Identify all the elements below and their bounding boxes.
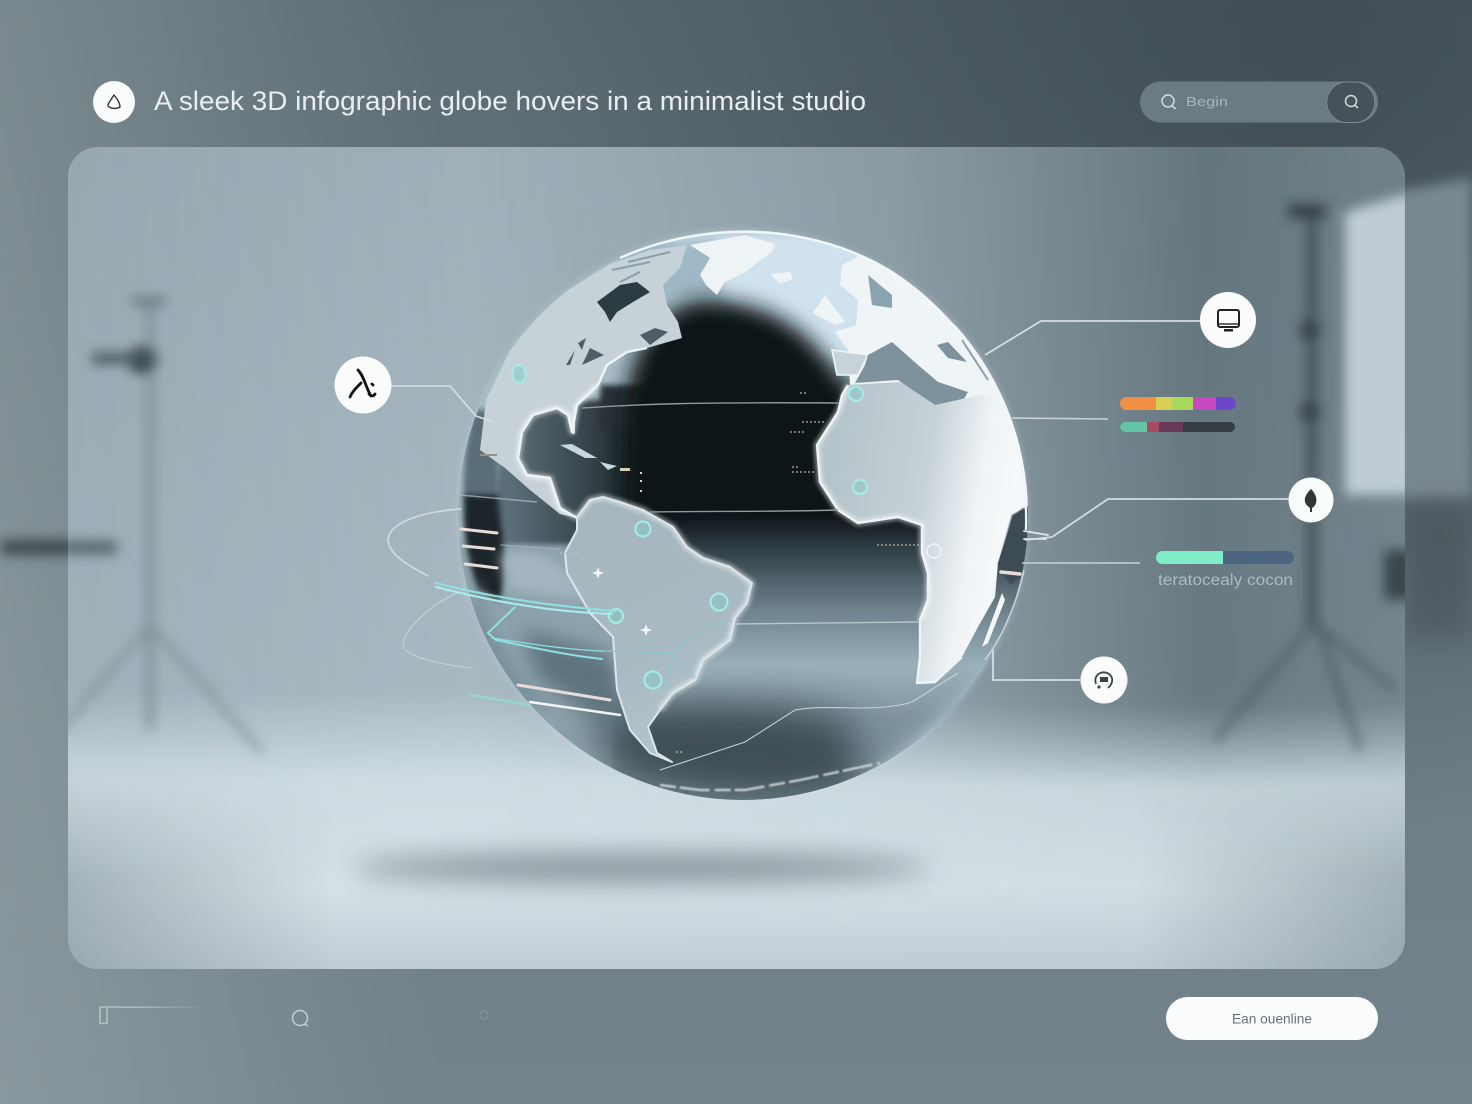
bright coastlines [518, 348, 962, 762]
Iberia outline [832, 350, 868, 375]
city markers [512, 365, 968, 688]
call to action button: Ean ouenline [1232, 1010, 1312, 1026]
sphere rim highlight [620, 232, 1026, 530]
dark north ocean [613, 284, 850, 520]
lower left glass [460, 538, 612, 768]
icon: search right [1346, 96, 1358, 108]
footer controls [100, 1006, 488, 1026]
gulf mid tone [496, 396, 640, 548]
header logo [93, 81, 135, 123]
icon: headphone [1095, 672, 1112, 689]
callout: audio icon [993, 650, 1128, 704]
icon: monitor [1218, 310, 1239, 332]
North America [480, 245, 687, 518]
northern lit water [660, 232, 880, 360]
search pill: Begin [1186, 95, 1228, 109]
reflection patch [600, 385, 652, 430]
icon: faint marker [480, 1011, 488, 1019]
globe [455, 228, 1045, 820]
icon: lambda glyph [350, 370, 375, 397]
call to action button [1166, 997, 1378, 1040]
floating shadow [350, 855, 930, 881]
sphere base [460, 230, 1024, 526]
coastline glow [518, 385, 928, 710]
main studio panel [60, 147, 1414, 969]
right blurred tripod [1215, 192, 1414, 750]
callout: monitor icon [985, 292, 1256, 355]
latitude and flight lines [460, 403, 958, 770]
Scandinavia Europe and Asia [835, 256, 1028, 510]
South America internal borders [603, 620, 732, 690]
chart: colour bars [1012, 397, 1236, 432]
progress bar with caption: teratocealy cocon [1158, 572, 1293, 589]
orbit rings and data streaks [388, 509, 1048, 715]
south ocean gradient [612, 515, 1030, 810]
progress track [100, 1006, 204, 1024]
icon: logo bell [108, 95, 120, 108]
inland seas [855, 275, 989, 405]
Caribbean islands [560, 418, 642, 492]
Africa [817, 382, 1045, 683]
tiny data marks [560, 393, 919, 752]
Madagascar [982, 593, 1005, 647]
bottom rim dashes [660, 763, 880, 790]
icon: search left [1162, 95, 1176, 109]
icon: footer search [292, 1010, 308, 1026]
callout: leaf icon [1025, 478, 1334, 540]
lower dark shading [590, 704, 865, 799]
left limb dark band [464, 495, 504, 600]
progress bar with caption [1022, 551, 1294, 589]
Greenland [690, 235, 775, 295]
Iceland [770, 272, 793, 284]
left blurred tripod [60, 296, 262, 752]
British Isles [813, 295, 845, 325]
search pill [1140, 82, 1378, 122]
title: A sleek 3D infographic globe hovers in a minimalist studio [154, 86, 866, 116]
right limb dark band [998, 505, 1030, 585]
Hudson Bay and lakes [566, 252, 670, 365]
South America [565, 497, 752, 762]
callout: left icon [334, 356, 494, 422]
left limb upper band [463, 410, 500, 505]
icon: leaf [1305, 489, 1316, 512]
